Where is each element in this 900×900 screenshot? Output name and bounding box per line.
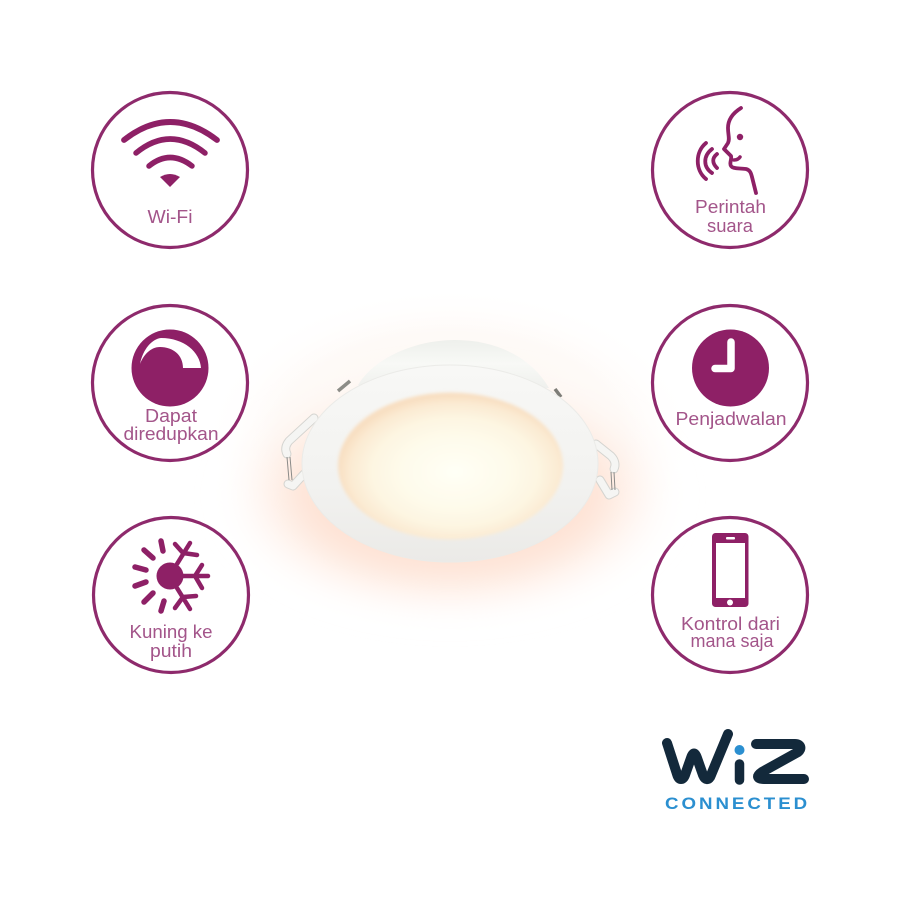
rim — [302, 365, 598, 562]
badge: voice command: suara — [707, 216, 754, 236]
light glow — [200, 285, 700, 623]
lens — [338, 392, 563, 540]
label: Perintah — [695, 197, 766, 217]
icon: clock — [692, 330, 769, 406]
badge: dimmable — [92, 306, 248, 460]
badge: remote control — [652, 518, 808, 672]
left spring clip — [286, 381, 350, 486]
icon: phone — [712, 533, 748, 607]
label: Kontrol dari — [681, 614, 780, 634]
badge: warm to cool: putih — [150, 641, 192, 661]
label: Dapat — [145, 406, 197, 426]
icon: sun and snowflake — [135, 541, 208, 611]
label: Penjadwalan — [676, 409, 786, 429]
housing dome — [358, 340, 549, 388]
label: Kuning ke — [130, 622, 212, 642]
logo: WiZ Connected — [665, 734, 810, 813]
label: Wi-Fi — [148, 207, 192, 227]
badge: dimmable: diredupkan — [124, 424, 218, 444]
badge: voice command — [652, 92, 808, 248]
badge: scheduling — [652, 306, 808, 460]
right spring clip — [555, 389, 615, 495]
icon: speaking face — [698, 108, 756, 193]
badge: Wi-Fi — [92, 92, 248, 248]
wordmark — [667, 734, 804, 780]
badge: warm to cool — [94, 518, 248, 672]
icon: dimmer — [132, 330, 208, 406]
downlight lamp — [286, 340, 615, 562]
icon: wifi — [124, 122, 217, 187]
badge: remote control: mana saja — [690, 631, 774, 651]
tagline: CONNECTED — [665, 794, 810, 813]
